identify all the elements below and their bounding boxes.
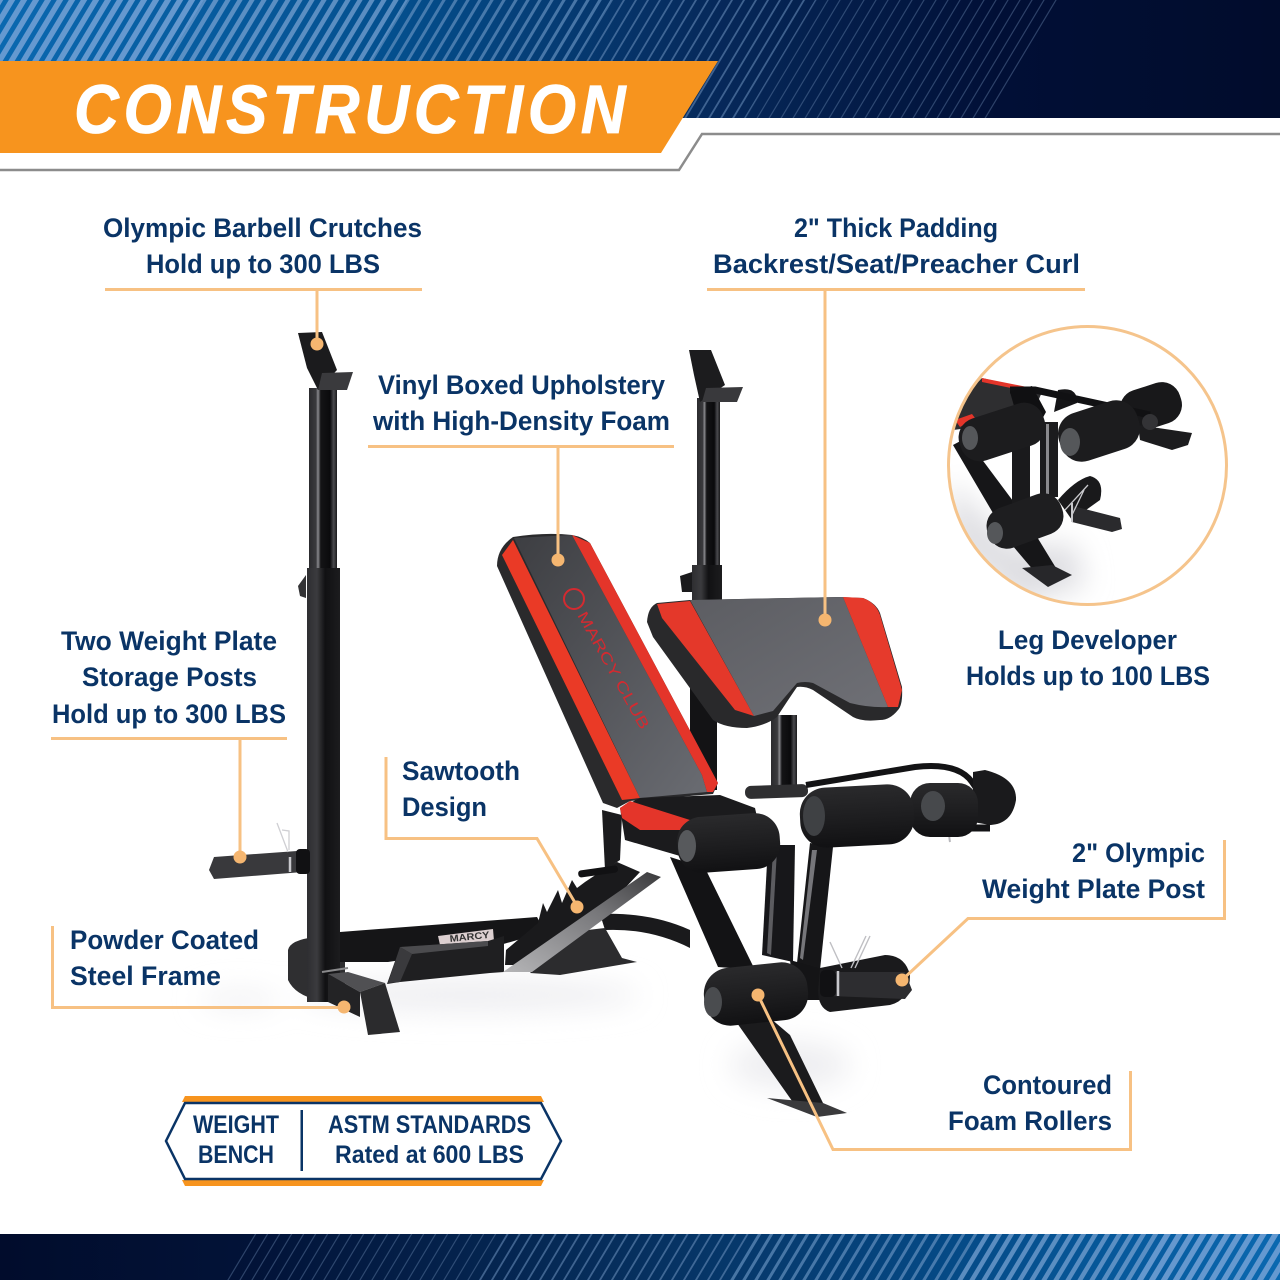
callout: thick padding: 2" Thick Padding	[794, 213, 998, 243]
foam roller: lower front	[701, 960, 811, 1028]
inset rollers	[958, 403, 1045, 461]
preacher curl stem	[771, 715, 797, 795]
marcy club wordmark: MARCY CLUB	[574, 609, 652, 732]
callout: olympic weight plate post: 2" Olympic	[1072, 838, 1205, 868]
callout: weight plate storage posts: Two Weight Plate	[61, 626, 277, 656]
leg developer tubes	[762, 843, 833, 1000]
marcy logo	[564, 589, 584, 609]
right rear upright	[680, 350, 743, 605]
header band	[0, 0, 1280, 170]
callout: olympic barbell crutches	[103, 213, 422, 350]
callout: olympic barbell crutches: Hold up to 300 LBS	[146, 249, 380, 279]
callout: olympic weight plate post	[896, 838, 1224, 986]
marcy label	[438, 929, 494, 945]
callout: weight plate storage posts: Storage Posts	[82, 662, 257, 692]
bench illustration	[200, 332, 1016, 1117]
callout: sawtooth design	[386, 756, 584, 914]
back pad	[497, 534, 718, 808]
callout: vinyl boxed upholstery: Vinyl Boxed Upholstery	[378, 370, 665, 400]
badge: weight bench astm standards: WEIGHT	[193, 1111, 279, 1139]
inset leg	[953, 442, 1012, 512]
weight plate post	[820, 936, 912, 999]
title banner: CONSTRUCTION	[74, 71, 630, 148]
callout: weight plate storage posts: Hold up to 300 LBS	[52, 699, 286, 729]
angled support	[503, 872, 661, 972]
foam roller: front upper left	[675, 811, 782, 874]
foam roller: rear right far	[910, 770, 1016, 837]
inset post	[1072, 506, 1122, 532]
badge: weight bench astm standards: BENCH	[198, 1141, 274, 1169]
main diagonal leg	[670, 857, 847, 1117]
front left stabilizer foot	[322, 968, 400, 1035]
floor shadows	[200, 979, 850, 1089]
seat	[620, 795, 760, 856]
callout: thick padding	[707, 213, 1085, 626]
rear back-pad tube	[690, 680, 717, 790]
callout: sawtooth design: Sawtooth	[402, 756, 520, 786]
inset seat	[954, 378, 1041, 430]
rear beam	[340, 917, 545, 962]
preacher curl pad	[647, 597, 902, 728]
inset floor shadow	[950, 480, 1085, 605]
foam roller: front upper right	[799, 783, 915, 849]
left upright	[298, 332, 353, 1002]
callout: olympic barbell crutches: Olympic Barbell Crutches	[103, 213, 422, 243]
left base foot	[288, 932, 345, 1003]
inset circle: leg developer detail	[945, 326, 1228, 606]
title banner	[0, 61, 718, 153]
callout: thick padding: Backrest/Seat/Preacher Curl	[713, 249, 1080, 279]
weight plate storage post	[209, 823, 310, 879]
rear lever bar	[745, 766, 990, 842]
badge: weight bench astm standards: Rated at 600 LBS	[335, 1141, 524, 1169]
badge: weight bench astm standards: ASTM STANDARDS	[328, 1111, 531, 1139]
callout: weight plate storage posts	[51, 626, 287, 864]
callout: leg developer	[966, 625, 1210, 691]
right rear base rail	[600, 914, 690, 948]
inset tubes	[1012, 446, 1030, 503]
callout: leg developer: Leg Developer	[998, 625, 1177, 655]
callout: powder coated steel frame: Steel Frame	[70, 961, 221, 991]
marcy label: MARCY	[449, 930, 491, 945]
callout: olympic weight plate post: Weight Plate Post	[982, 874, 1205, 904]
callout: vinyl boxed upholstery	[368, 370, 674, 566]
sawtooth adjuster arm	[505, 862, 640, 965]
callout: vinyl boxed upholstery: with High-Density Foam	[372, 406, 670, 436]
callout: sawtooth design: Design	[402, 792, 487, 822]
callout: leg developer: Holds up to 100 LBS	[966, 661, 1210, 691]
lower rear foam roller	[818, 955, 910, 1012]
callout: contoured foam rollers: Contoured	[983, 1070, 1112, 1100]
callout: contoured foam rollers: Foam Rollers	[948, 1106, 1112, 1136]
central base beam	[387, 928, 637, 984]
seat post and pin	[578, 810, 622, 878]
callout: powder coated steel frame: Powder Coated	[70, 925, 259, 955]
inset rear rollers	[1054, 389, 1077, 412]
callout: powder coated steel frame	[52, 925, 350, 1014]
footer band	[0, 1234, 1280, 1280]
inset top bracket	[1010, 386, 1108, 406]
badge: weight bench astm standards	[166, 1096, 561, 1186]
callout: contoured foam rollers	[752, 988, 1130, 1150]
